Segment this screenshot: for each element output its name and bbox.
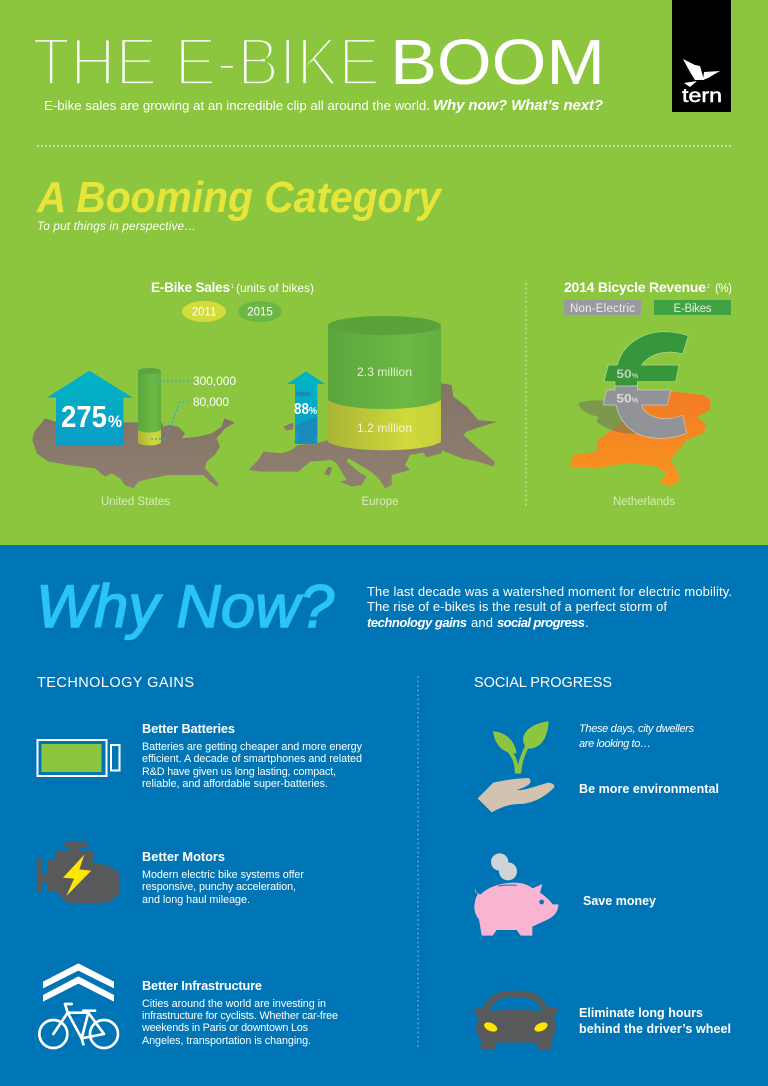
text: intro paragraph: and (471, 615, 493, 630)
text: intro paragraph (367, 584, 732, 630)
arrow: US growth 275% (47, 371, 133, 445)
legend: revenue: E-Bikes (674, 303, 712, 315)
heading: e-bike sales: (units of bikes) (236, 281, 314, 295)
heading: e-bike sales: E-Bike Sales (151, 280, 230, 295)
heading: bicycle revenue: (%) (715, 283, 732, 295)
text block: better batteries: R&D have given us long lasting, compact, (142, 766, 336, 778)
text: intro paragraph: . (585, 615, 589, 630)
text block: eliminate long hours: Eliminate long hours (579, 1006, 703, 1020)
heading: e-bike sales (151, 280, 314, 295)
text block: better motors: Modern electric bike systems offer (142, 869, 304, 881)
label: United States: United States (101, 496, 170, 508)
legend: revenue (564, 300, 731, 315)
chart: US cylinder (138, 368, 161, 446)
arrow: Europe growth 88%: 88 (294, 401, 309, 418)
chart: euro symbol 50/50: % (632, 371, 639, 380)
text block: eliminate long hours (579, 1006, 731, 1036)
text: intro paragraph: The rise of e-bikes is the result of a perfect storm of (367, 599, 667, 614)
map: Europe (248, 383, 497, 488)
text block: city dwellers: are looking to… (579, 738, 651, 750)
text block: better infrastructure: Better Infrastructure (142, 978, 262, 993)
legend: years (182, 301, 282, 322)
chart: euro symbol 50/50: 50 (616, 391, 632, 405)
chart: euro symbol 50/50: 50 (616, 367, 632, 381)
text: perspective: To put things in perspective… (37, 219, 196, 233)
text: be more environmental: Be more environmental (579, 782, 719, 796)
icon: piggy bank (474, 853, 558, 936)
chart: euro symbol 50/50 (578, 332, 688, 438)
label: 80,000: 80,000 (193, 395, 229, 409)
heading: A Booming Category: A Booming Category (36, 173, 443, 222)
heading: social progress: SOCIAL PROGRESS (474, 675, 612, 691)
panel: blue why now background (0, 545, 768, 1086)
icon: car (474, 991, 557, 1050)
text: intro paragraph: The last decade was a watershed moment for electric mobility. (367, 584, 732, 599)
text block: better infrastructure: Angeles, transportation is changing. (142, 1035, 311, 1047)
label: Europe: Europe (361, 496, 399, 508)
map: United States (32, 418, 235, 488)
title: THE E-BIKE (32, 24, 380, 100)
text block: better batteries: Batteries are getting cheaper and more energy (142, 741, 363, 753)
legend: revenue: Non-Electric (570, 303, 635, 315)
label: Netherlands: Netherlands (613, 496, 675, 508)
text block: better motors: responsive, punchy acceleration, (142, 881, 296, 893)
text block: better infrastructure: Cities around the world are investing in (142, 998, 326, 1010)
subtitle: E-bike sales are growing at an incredible clip all around the world. (44, 98, 430, 113)
text: intro paragraph: technology gains (367, 615, 467, 630)
map: Netherlands (570, 392, 711, 487)
legend: years: 2015 (247, 306, 273, 318)
text block: better motors: and long haul mileage. (142, 894, 250, 906)
title: BOOM (390, 26, 605, 98)
chart: Europe cylinder (328, 316, 441, 450)
text block: eliminate long hours: behind the driver’s wheel (579, 1022, 731, 1036)
text block: better batteries: Better Batteries (142, 721, 235, 736)
panel: green header background (0, 0, 768, 545)
text block: better infrastructure: weekends in Paris or downtown Los (141, 1022, 309, 1034)
heading: bicycle revenue: 2014 Bicycle Revenue (564, 279, 706, 295)
chart: euro symbol 50/50: % (632, 395, 639, 404)
icon: engine (37, 842, 120, 904)
icon: chevrons and bicycle (39, 963, 118, 1048)
icon: plant in hand (478, 721, 554, 812)
heading: bicycle revenue: 2 (707, 284, 710, 290)
text block: better batteries (142, 721, 363, 790)
heading: e-bike sales: 1 (231, 284, 234, 290)
legend: years: 2011 (192, 306, 216, 318)
logo: tern: tern (682, 86, 722, 107)
chart: Europe cylinder: 2.3 million (357, 365, 412, 379)
heading: Why Now?: Why Now? (36, 573, 335, 640)
arrow: US growth 275%: % (108, 412, 122, 431)
text block: better infrastructure: infrastructure for cyclists. Whether car-free (142, 1010, 338, 1022)
subtitle: Why now? What’s next? (433, 97, 603, 114)
arrow: US growth 275%: 275 (61, 399, 107, 434)
text block: city dwellers: These days, city dwellers (579, 723, 694, 735)
chart: Europe cylinder: 1.2 million (357, 421, 412, 435)
icon: battery (38, 740, 120, 776)
text: intro paragraph: social progress (497, 615, 585, 630)
text block: better infrastructure (141, 978, 338, 1047)
text block: city dwellers (579, 723, 694, 750)
arrow: Europe growth 88%: % (309, 406, 317, 417)
title (32, 24, 605, 100)
text block: better batteries: reliable, and affordable super-batteries. (142, 778, 328, 790)
text block: better batteries: efficient. A decade of smartphones and related (142, 753, 362, 765)
text: save money: Save money (583, 894, 656, 908)
text block: better motors: Better Motors (142, 849, 225, 864)
heading: technology gains: TECHNOLOGY GAINS (37, 675, 194, 691)
label: 300,000: 300,000 (193, 374, 236, 388)
callout lines: US values (151, 381, 190, 439)
text block: better motors (142, 849, 304, 906)
arrow: Europe growth 88% (287, 371, 325, 444)
subtitle (44, 97, 603, 114)
logo: tern (672, 0, 731, 112)
